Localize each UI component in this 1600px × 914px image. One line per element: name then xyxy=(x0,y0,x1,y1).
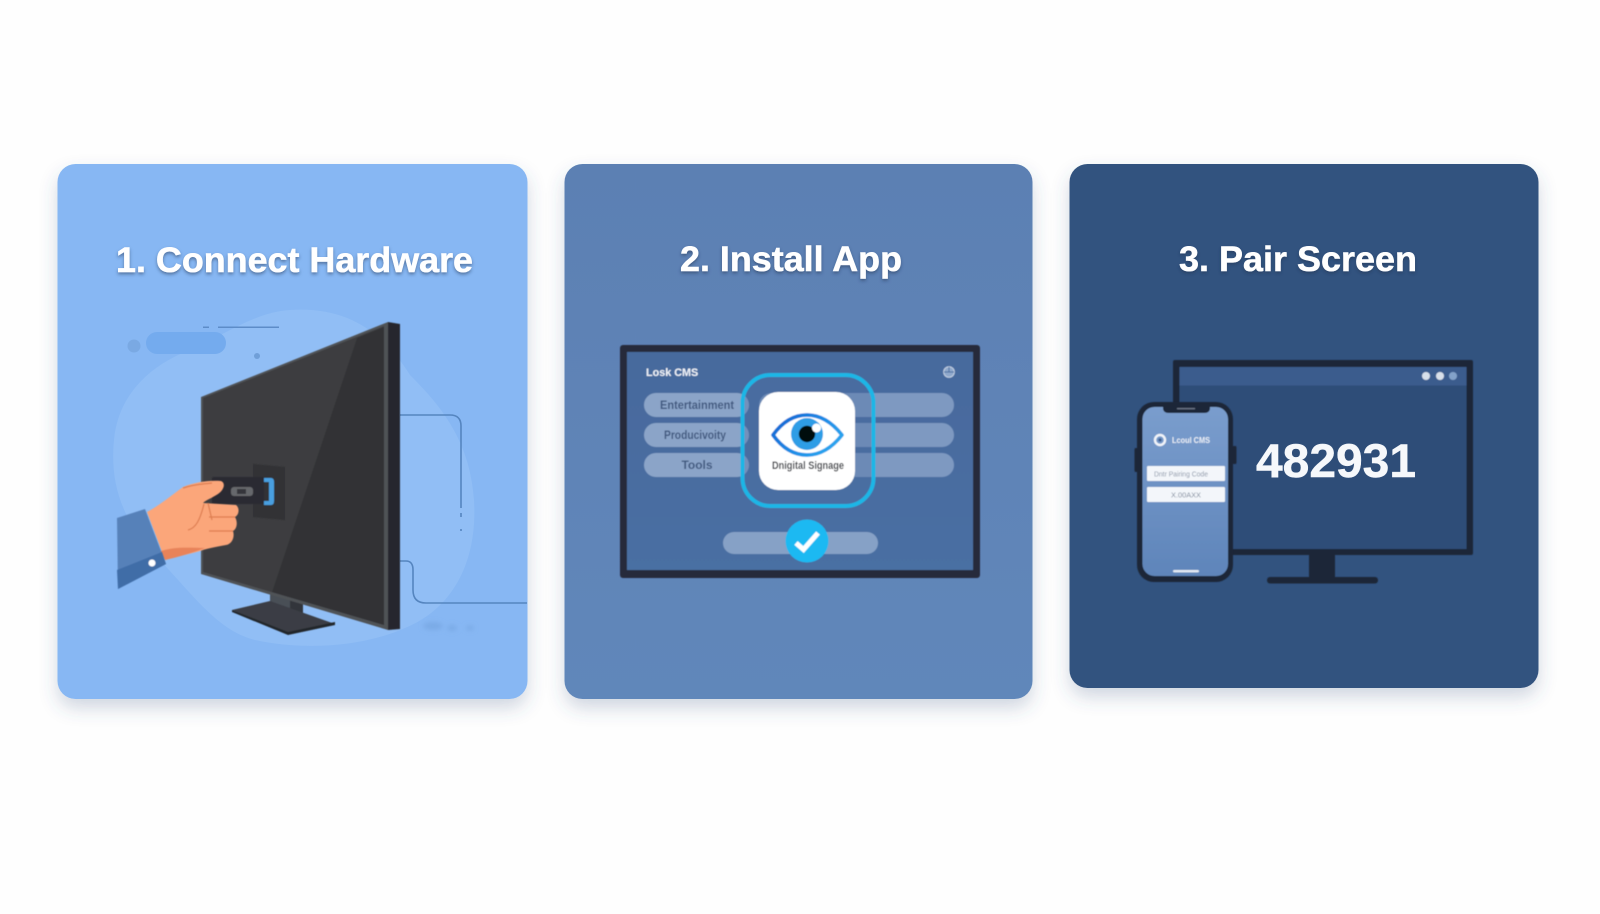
browser bar xyxy=(1180,367,1466,386)
cable: lower xyxy=(400,561,527,603)
monitor frame xyxy=(1173,360,1473,555)
input: pairing code label xyxy=(1147,466,1225,481)
phone notch xyxy=(1163,406,1210,413)
settings icon xyxy=(944,367,954,377)
input: code xyxy=(1147,487,1225,502)
monitor body xyxy=(201,322,400,630)
monitor in perspective xyxy=(201,322,400,635)
side buttons xyxy=(1134,446,1236,472)
input: pairing code label: Dntr Pairing Code xyxy=(1154,470,1208,478)
panel: step 3 pair screen xyxy=(1070,164,1538,688)
background blob xyxy=(113,310,474,646)
panel: step 1 connect hardware xyxy=(58,164,528,699)
pairing code: 482931 xyxy=(1256,434,1416,487)
phone screen xyxy=(1142,407,1228,576)
input: code: X.00AXX xyxy=(1171,490,1201,500)
menu pill: Productivity xyxy=(644,423,749,447)
card background 2 xyxy=(564,164,1032,699)
checkmark badge xyxy=(786,520,828,562)
menu pill: Productivity: Producivoity xyxy=(664,428,726,442)
tv screen xyxy=(627,352,973,570)
monitor screen xyxy=(1180,367,1466,549)
tv frame with app store screen xyxy=(620,345,980,578)
card background 3 xyxy=(1070,164,1538,688)
progress pill xyxy=(723,532,878,554)
heading: 1. Connect Hardware: 1. Connect Hardware xyxy=(116,241,473,280)
heading: 2. Install App: 2. Install App xyxy=(680,240,902,279)
eye logo xyxy=(773,415,842,455)
phone body xyxy=(1137,402,1233,582)
app name: Dnigital Signage xyxy=(772,460,844,472)
menu pill: Tools xyxy=(644,453,749,477)
phone app name: Lcoul CMS xyxy=(1172,435,1210,445)
phone app logo xyxy=(1155,435,1165,445)
app icon xyxy=(759,392,855,490)
home indicator xyxy=(1173,570,1199,572)
monitor stand xyxy=(232,586,335,635)
menu pill: Entertainment: Entertainment xyxy=(660,398,734,412)
panel: step 2 install app xyxy=(564,164,1032,699)
right side pills xyxy=(759,393,954,477)
heading: 3. Pair Screen: 3. Pair Screen xyxy=(1179,240,1417,279)
highlight ring xyxy=(742,375,874,506)
desktop monitor xyxy=(1173,360,1473,584)
menu pill: Tools: Tools xyxy=(681,458,713,472)
shirt sleeve with button xyxy=(117,509,166,589)
tv frame xyxy=(620,345,980,578)
phone xyxy=(1134,402,1236,582)
screen title: Losk CMS: Losk CMS xyxy=(646,367,698,379)
hand holding dongle xyxy=(147,481,239,560)
card background 1 xyxy=(58,164,528,699)
cable: upper xyxy=(400,415,461,531)
decorative pill and dots xyxy=(128,326,279,359)
blurred floor smudge xyxy=(423,622,474,631)
menu pill: Entertainment xyxy=(644,393,749,417)
hdmi dongle and port xyxy=(212,464,285,520)
monitor stand xyxy=(1267,555,1378,584)
